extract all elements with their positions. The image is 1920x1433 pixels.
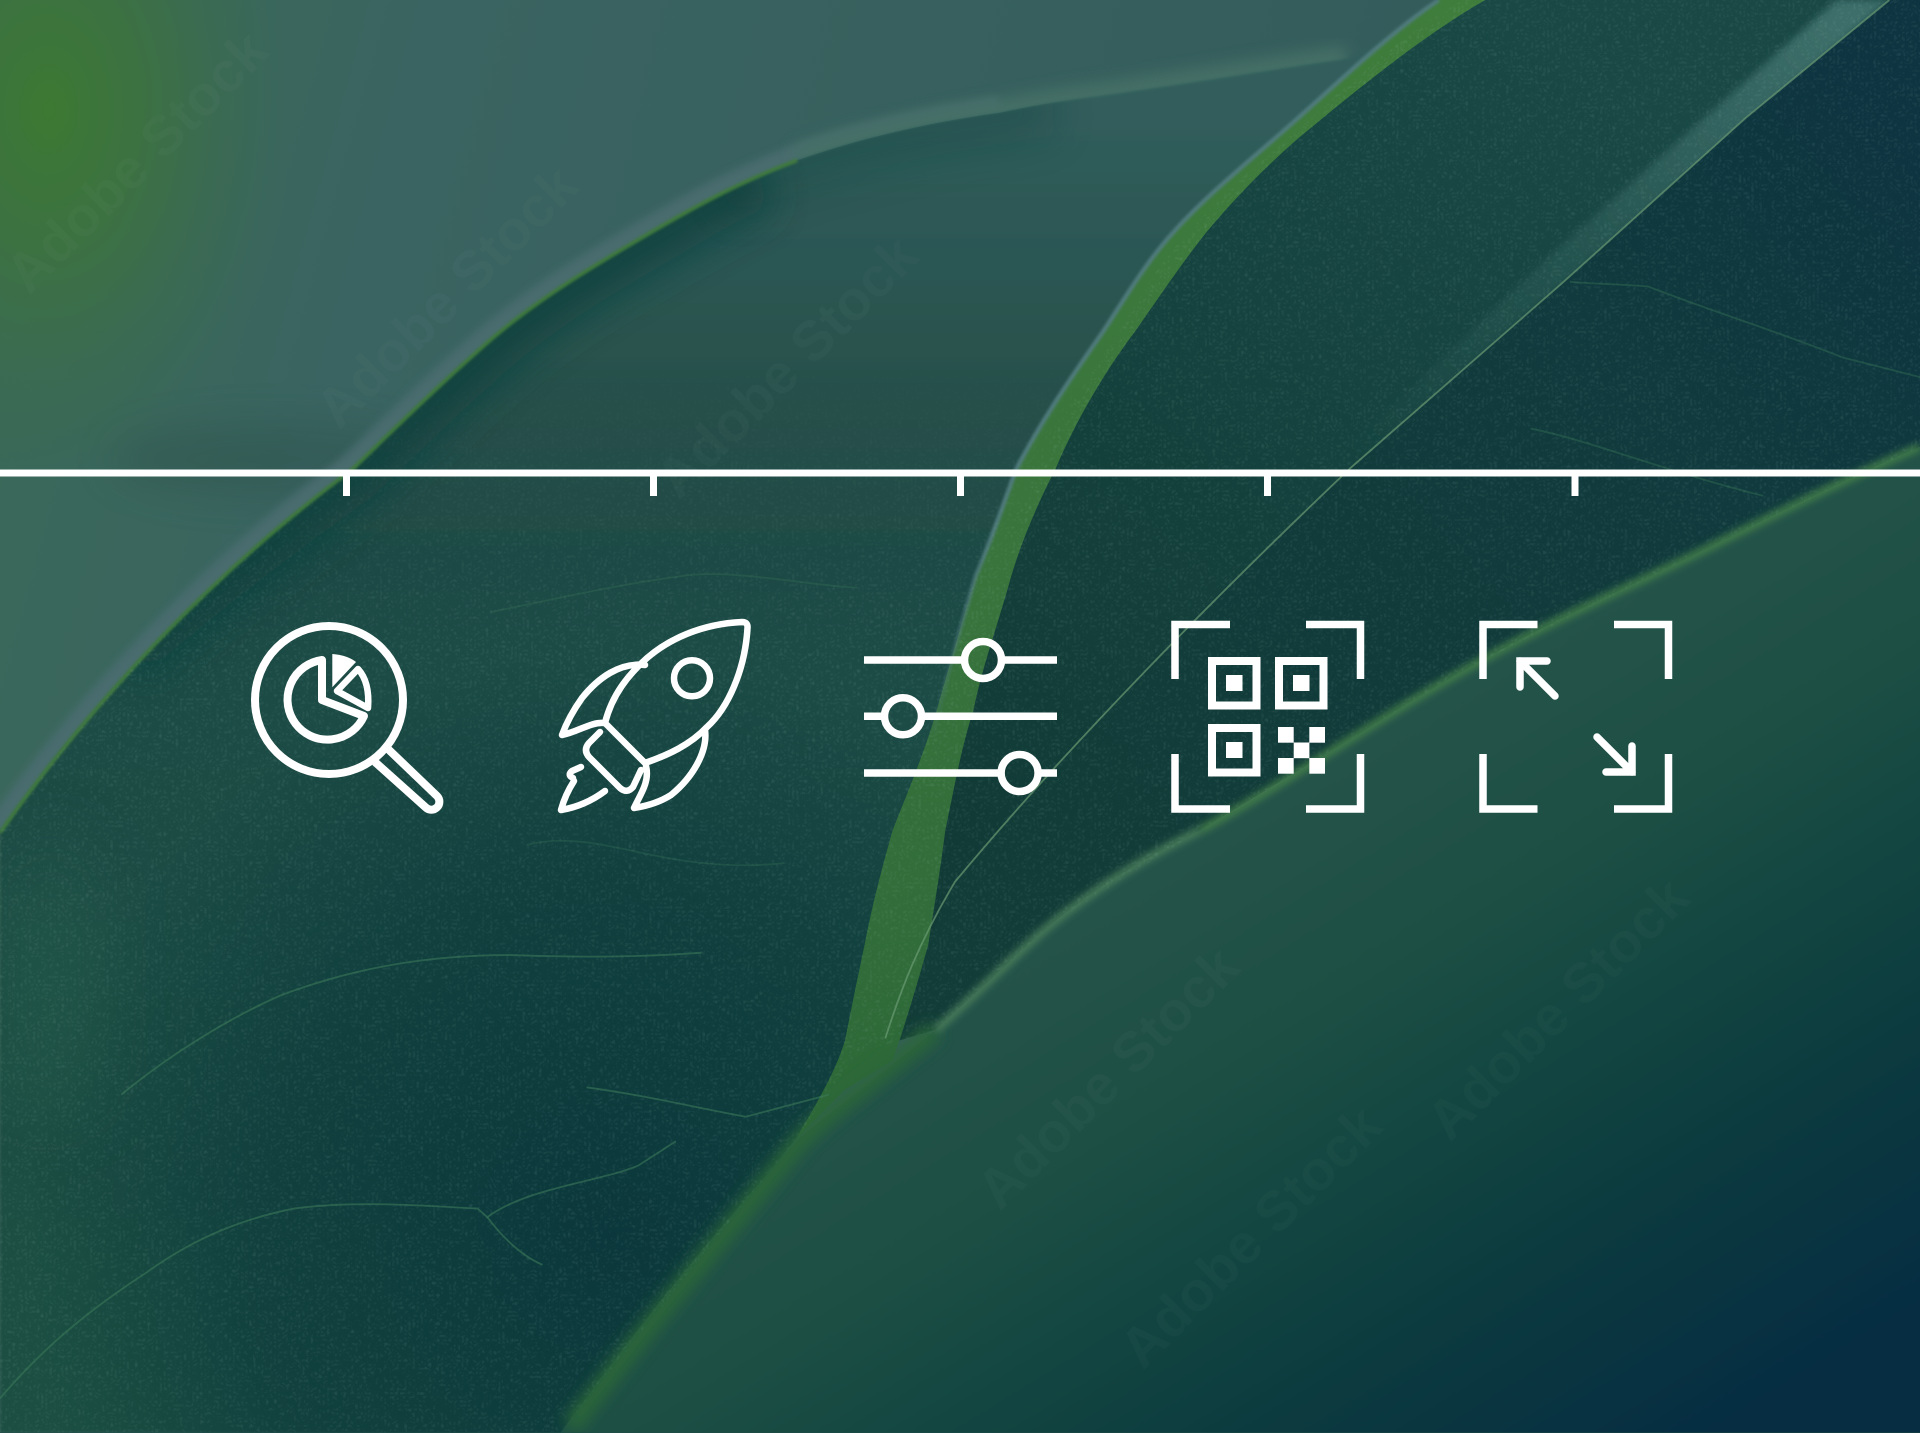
watermark: Adobe Stock: Adobe Stock bbox=[964, 933, 1251, 1220]
watermark: Adobe Stock: Adobe Stock bbox=[0, 17, 280, 304]
timeline ticks bbox=[343, 476, 1578, 496]
icon: rocket bbox=[561, 622, 748, 810]
stem bbox=[796, 0, 1485, 1139]
icon: expand arrows in frame bbox=[1483, 624, 1668, 809]
icon: magnifier with pie chart bbox=[255, 626, 439, 810]
watermark: Adobe Stock: Adobe Stock bbox=[1414, 864, 1701, 1151]
icon: sliders bbox=[864, 642, 1057, 792]
watermark: Adobe Stock: Adobe Stock bbox=[643, 222, 930, 509]
horizontal timeline line bbox=[0, 470, 1920, 476]
watermark: Adobe Stock: Adobe Stock bbox=[303, 152, 590, 439]
icon: QR code scan bbox=[1175, 624, 1360, 809]
watermark: Adobe Stock: Adobe Stock bbox=[1107, 1092, 1394, 1379]
